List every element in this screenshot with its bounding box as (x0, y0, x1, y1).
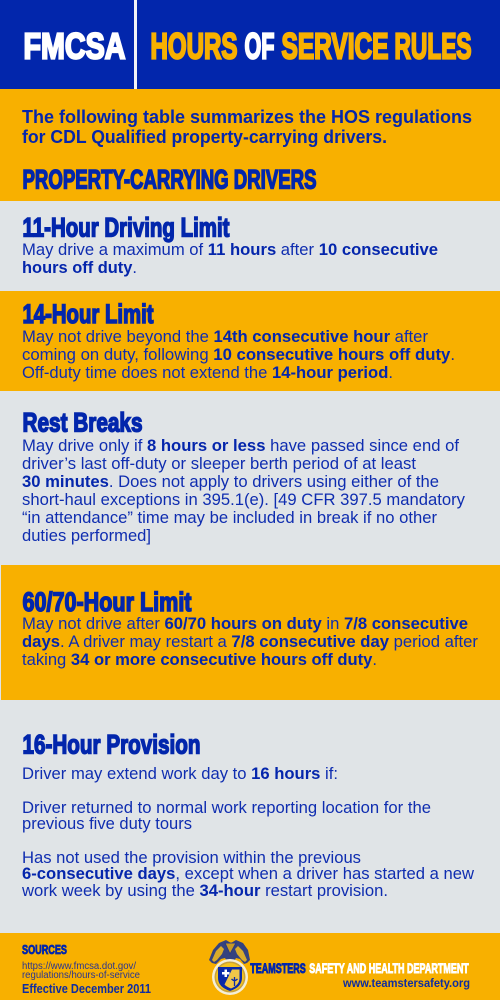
body text (22, 436, 466, 545)
title: hours of service rules: SERVICE (282, 26, 388, 66)
horse heads and yoke (209, 940, 250, 964)
body text: Has not used the provision within the previous (22, 848, 361, 867)
heading: 14-hour limit: 14-Hour Limit (22, 299, 154, 329)
website: www.teamstersafety.org (342, 978, 470, 990)
body text: duties performed] (22, 526, 151, 545)
body text: work week by using the 34-hour restart provision. (21, 881, 388, 900)
body text: driver’s last off-duty or sleeper berth period of at least (22, 454, 416, 473)
body text: coming on duty, following 10 consecutive hours off duty. (22, 345, 455, 364)
panel: 11-hour driving limit (0, 201, 500, 291)
heading: 11-hour driving limit: 11-Hour Driving Limit (22, 212, 230, 242)
body text: May not drive after 60/70 hours on duty in 7/8 consecutive (22, 614, 468, 633)
body text: hours off duty. (22, 258, 137, 277)
intro text (22, 107, 472, 147)
body text: May drive a maximum of 11 hours after 10 consecutive (22, 240, 438, 259)
heading: 16-hour provision: 16-Hour Provision (22, 730, 200, 760)
body text: previous five duty tours (22, 814, 192, 833)
panel: 60/70-hour limit (1, 565, 500, 700)
source url (22, 961, 140, 981)
effective date: Effective December 2011 (22, 982, 151, 996)
department name (250, 961, 469, 976)
department name: TEAMSTERS (250, 961, 306, 976)
body text (22, 240, 438, 277)
body text (22, 614, 478, 669)
panel: 14-hour limit (0, 291, 500, 391)
footer panel (0, 933, 500, 1000)
heading: 60/70-hour limit: 60/70-Hour Limit (22, 587, 192, 617)
body text: taking 34 or more consecutive hours off duty. (22, 650, 377, 669)
body text: days. A driver may restart a 7/8 consecutive day period after (22, 632, 478, 651)
body text: Driver may extend work day to 16 hours if: (22, 764, 338, 783)
body text (22, 327, 455, 382)
title: hours of service rules (150, 26, 472, 66)
body text: May not drive beyond the 14th consecutive hour after (22, 327, 428, 346)
title: hours of service rules: HOURS (150, 26, 238, 66)
panel: rest breaks (0, 391, 500, 565)
icon: teamsters logo (209, 940, 250, 995)
title: FMCSA: FMCSA (24, 26, 126, 66)
intro text: for CDL Qualified property-carrying drivers. (22, 127, 387, 147)
title: hours of service rules: OF (244, 26, 274, 66)
heading: property-carrying drivers: PROPERTY-CARRYING DRIVERS (22, 164, 316, 194)
body text: Driver returned to normal work reporting location for the (22, 798, 431, 817)
seal (212, 959, 248, 995)
panel: introduction (0, 89, 500, 201)
body text: 6-consecutive days, except when a driver has started a new (22, 864, 475, 883)
header banner (0, 0, 500, 89)
source url: https://www.fmcsa.dot.gov/ (22, 961, 136, 972)
body text: May drive only if 8 hours or less have passed since end of (22, 436, 459, 455)
body text: “in attendance” time may be included in break if no other (22, 508, 437, 527)
source url: regulations/hours-of-service (22, 970, 140, 981)
body text: short-haul exceptions in 395.1(e). [49 CFR 397.5 mandatory (22, 490, 466, 509)
body text: Off-duty time does not extend the 14-hour period. (22, 363, 393, 382)
sources heading: SOURCES (22, 943, 67, 957)
body text: 30 minutes. Does not apply to drivers using either of the (22, 472, 439, 491)
heading: rest breaks: Rest Breaks (22, 408, 142, 438)
panel: 16-hour provision (0, 700, 500, 933)
body text (21, 764, 475, 900)
intro text: The following table summarizes the HOS regulations (22, 107, 472, 127)
